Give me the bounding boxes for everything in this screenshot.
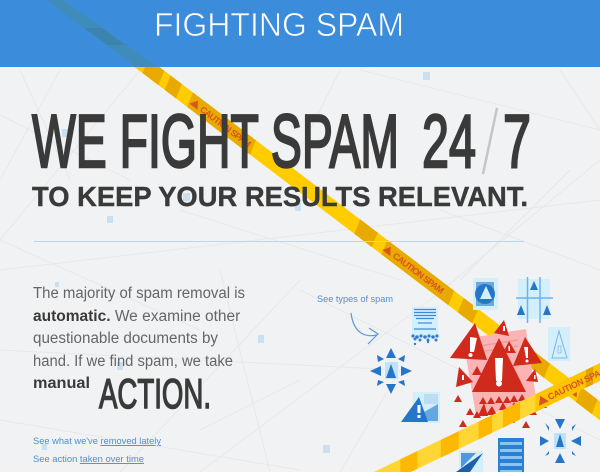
icon: document <box>411 307 439 345</box>
icon: bottom alert document <box>456 451 483 472</box>
headline: 24 <box>422 99 476 183</box>
icon: grid alert <box>516 277 553 323</box>
subheading: TO KEEP YOUR RESULTS RELEVANT. <box>32 181 528 212</box>
icon: chat alert <box>473 278 498 310</box>
body paragraph: The majority of spam removal is <box>33 285 245 302</box>
icon: warning burst small <box>540 419 581 463</box>
body paragraph <box>33 285 245 417</box>
body paragraph: questionable documents by <box>33 330 218 347</box>
spam types label: See types of spam <box>317 294 393 305</box>
title: FIGHTING SPAM <box>154 6 404 43</box>
body paragraph: ACTION. <box>99 370 211 417</box>
body paragraph: manual <box>33 375 90 392</box>
links: See what we've removed lately <box>33 436 161 447</box>
links: See action taken over time <box>33 454 144 465</box>
body paragraph: hand. If we find spam, we take <box>33 353 233 370</box>
tape text: CAUTION SPAM <box>198 104 253 150</box>
icon: server <box>498 438 524 472</box>
tape text: CAUTION SPAM <box>391 251 446 296</box>
links <box>33 436 161 465</box>
caution tape: crossing band <box>372 356 600 472</box>
background node squares <box>42 72 439 453</box>
headline: 7 <box>503 99 531 183</box>
caution tape: long diagonal <box>119 43 600 430</box>
icon: alert document <box>401 392 440 423</box>
divider <box>34 240 524 242</box>
header banner <box>0 0 600 67</box>
icon: outline triangle <box>548 327 570 361</box>
arrow <box>351 313 378 344</box>
body paragraph: automatic. We examine other <box>33 308 240 325</box>
icon: warning burst <box>370 348 412 394</box>
red warning cluster <box>450 320 547 428</box>
